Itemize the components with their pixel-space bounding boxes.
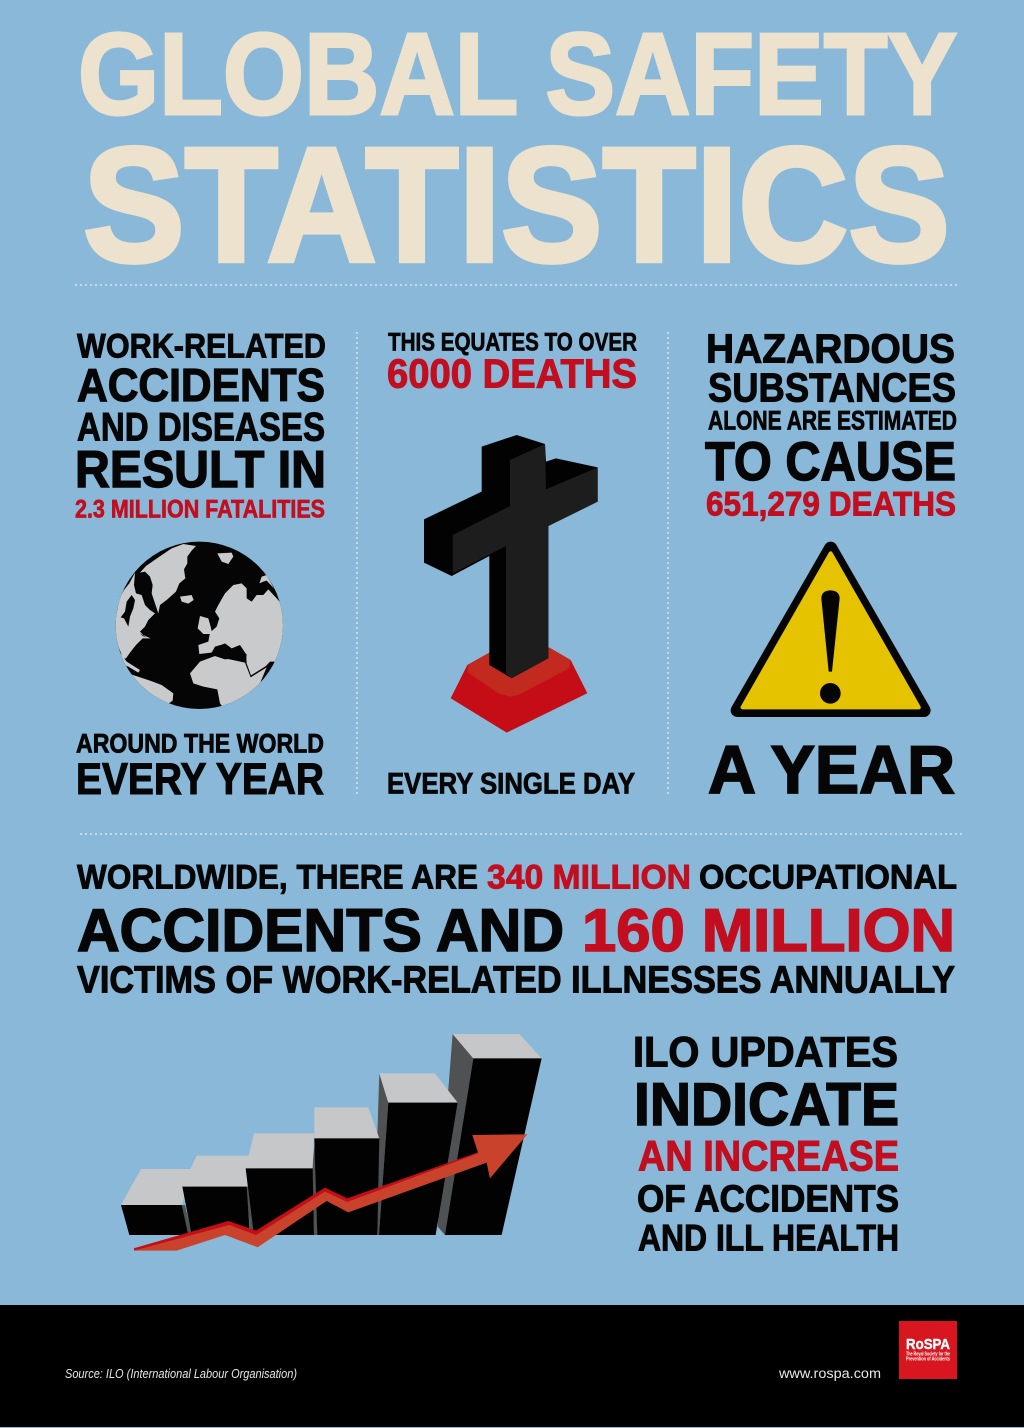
text block: around the world every year: AROUND THE WORLD	[76, 728, 324, 758]
text block: worldwide statistics: VICTIMS OF WORK-RELATED ILLNESSES ANNUALLY	[77, 958, 955, 1000]
footer	[0, 1305, 1024, 1427]
text block: 6000 deaths: 6000 DEATHS	[387, 350, 637, 396]
text block: fatalities heading: RESULT IN	[75, 441, 326, 499]
text block: 6000 deaths	[387, 328, 637, 396]
arrow: upward trend	[134, 1134, 527, 1251]
text block: worldwide statistics	[77, 858, 957, 1000]
text block: hazardous substances heading	[705, 326, 957, 524]
text block: around the world every year	[76, 728, 324, 804]
chart: rising bars with arrow	[121, 1034, 542, 1251]
panel: hazardous substances	[705, 326, 957, 808]
icon: cross on red base	[424, 435, 598, 733]
title	[78, 9, 957, 296]
text block: fatalities heading: WORK-RELATED	[77, 328, 326, 366]
text block: worldwide statistics: 340 MILLION	[487, 858, 691, 896]
text block: ILO updates: OF ACCIDENTS	[637, 1178, 899, 1220]
logo: RoSPA: RoSPA	[906, 1336, 950, 1353]
text block: worldwide statistics: OCCUPATIONAL	[699, 858, 957, 896]
text block: ILO updates: AN INCREASE	[638, 1134, 899, 1180]
source note: Source: ILO (International Labour Organisation)	[65, 1367, 297, 1381]
text block: hazardous substances heading: HAZARDOUS	[706, 326, 955, 372]
logo: RoSPA: The Royal Society for the	[906, 1352, 950, 1358]
logo: RoSPA: Prevention of Accidents	[906, 1356, 950, 1362]
text block: fatalities heading: AND DISEASES	[77, 406, 325, 450]
text block: hazardous substances heading: 651,279 DEATHS	[706, 486, 956, 524]
text block: ILO updates: AND ILL HEALTH	[638, 1218, 899, 1258]
text block: worldwide statistics: 160 MILLION	[582, 896, 955, 964]
logo: RoSPA	[899, 1321, 957, 1379]
text block: hazardous substances heading: ALONE ARE ESTIMATED	[708, 406, 957, 436]
icon: globe	[113, 542, 290, 717]
text block: every single day: EVERY SINGLE DAY	[387, 768, 635, 800]
panel: fatalities	[75, 328, 326, 804]
text block: ILO updates: ILO UPDATES	[633, 1030, 898, 1076]
panel: daily deaths	[387, 328, 637, 800]
website: www.rospa.com	[778, 1366, 881, 1381]
text block: around the world every year: EVERY YEAR	[76, 755, 324, 804]
text block: ILO updates	[633, 1030, 899, 1258]
text block: fatalities heading	[75, 328, 326, 524]
text block: 6000 deaths: THIS EQUATES TO OVER	[388, 328, 637, 356]
text block: ILO updates: INDICATE	[634, 1070, 899, 1138]
text block: worldwide statistics: ACCIDENTS AND	[77, 896, 564, 964]
text block: worldwide statistics: WORLDWIDE, THERE ARE	[77, 858, 478, 896]
text block: a year: A YEAR	[708, 733, 955, 808]
text block: hazardous substances heading: SUBSTANCES	[708, 364, 956, 410]
text block: fatalities heading: ACCIDENTS	[77, 359, 325, 411]
icon: warning triangle	[737, 548, 924, 710]
text block: hazardous substances heading: TO CAUSE	[705, 430, 956, 492]
text block: fatalities heading: 2.3 MILLION FATALITIES	[75, 496, 325, 524]
title: STATISTICS	[83, 113, 950, 296]
